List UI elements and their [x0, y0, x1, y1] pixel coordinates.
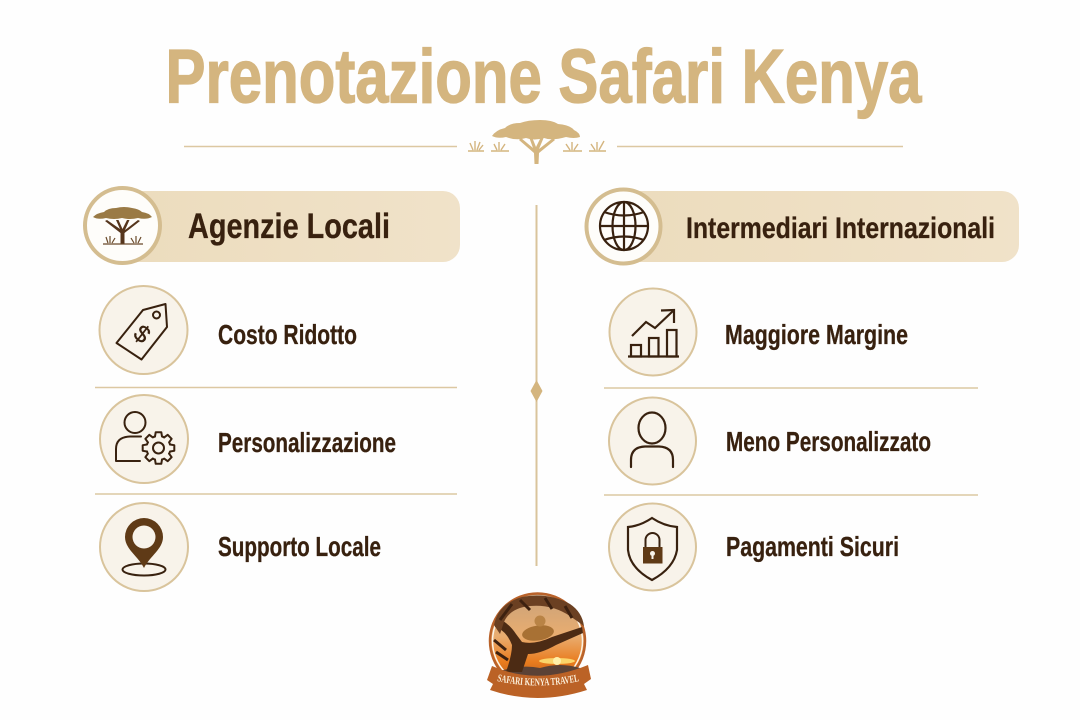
center divider — [530, 205, 542, 566]
icon: shield with lock — [628, 518, 677, 580]
icon: price tag — [116, 304, 167, 360]
header pill: agenzie locali — [120, 191, 460, 262]
header pill: intermediari internazionali — [622, 191, 1019, 262]
label: supporto locale: Supporto Locale — [218, 531, 381, 562]
label: maggiore margine: Maggiore Margine — [725, 319, 908, 350]
icon: acacia tree — [93, 207, 152, 244]
heading: agenzie locali: Agenzie Locali — [188, 207, 390, 246]
icon: user — [631, 412, 673, 467]
row: maggiore margine — [610, 288, 908, 376]
heading: intermediari internazionali: Intermediari Internazionali — [686, 212, 995, 245]
header badge circle — [85, 188, 160, 263]
header badge circle — [586, 190, 660, 264]
row: supporto locale — [100, 503, 381, 591]
logo: safari kenya travel — [487, 592, 591, 698]
row: meno personalizzato — [609, 398, 931, 484]
label: meno personalizzato: Meno Personalizzato — [726, 426, 931, 457]
icon: growth chart — [628, 310, 679, 356]
label: costo ridotto: Costo Ridotto — [218, 319, 357, 350]
panel: intermediari internazionali — [586, 190, 1019, 590]
label: personalizzazione: Personalizzazione — [218, 427, 396, 458]
icon: globe — [600, 202, 648, 250]
row: pagamenti sicuri — [609, 504, 899, 590]
icon: user with gear — [116, 412, 174, 464]
label: pagamenti sicuri: Pagamenti Sicuri — [726, 531, 899, 562]
panel: agenzie locali — [85, 188, 460, 591]
icon: location pin — [122, 518, 166, 576]
row: costo ridotto — [100, 286, 357, 374]
logo banner: SAFARI KENYA TRAVEL — [497, 674, 579, 686]
icon: price tag: $ — [128, 320, 155, 349]
title divider with acacia tree — [184, 120, 903, 164]
row: personalizzazione — [100, 395, 396, 483]
